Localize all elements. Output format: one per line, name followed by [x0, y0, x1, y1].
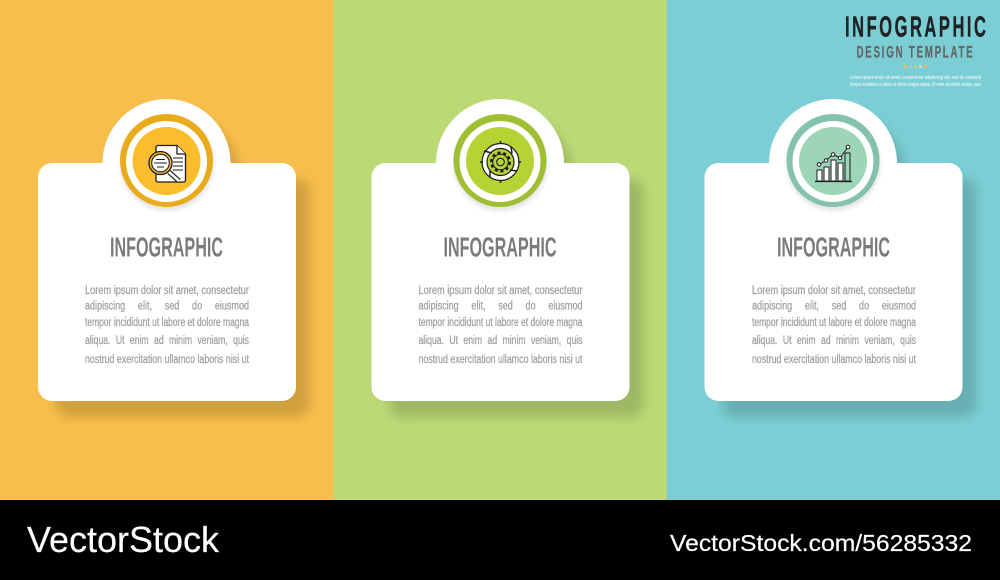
text block: card one: aliqua. Ut enim ad minim veniam, quis	[85, 335, 249, 347]
footer bar	[0, 500, 1000, 580]
heading: card three: INFOGRAPHIC	[777, 232, 890, 262]
panel: orange background	[0, 0, 334, 500]
text block: card three: Lorem ipsum dolor sit amet, consectetur	[752, 285, 916, 297]
card one body	[38, 99, 296, 401]
text block: card two: tempor incididunt ut labore et dolore magna	[418, 317, 583, 329]
card three shadow	[722, 113, 976, 417]
text block: card two: nostrud exercitation ullamco laboris nisi ut	[418, 354, 583, 366]
card one ring shadow	[120, 117, 214, 211]
card two ring	[454, 114, 546, 207]
text block: card three: adipiscing elit, sed do eiusmod	[752, 300, 916, 312]
panel: green background	[333, 0, 667, 500]
text block: card one: tempor incididunt ut labore et dolore magna	[85, 317, 249, 329]
text block: card one: Lorem ipsum dolor sit amet, consectetur	[85, 285, 249, 297]
card two ring shadow	[454, 117, 548, 211]
card two body	[372, 99, 630, 401]
text block: card two: Lorem ipsum dolor sit amet, consectetur	[418, 285, 583, 297]
title description	[850, 75, 981, 88]
card one shadow	[56, 113, 310, 417]
decorative colour dots	[904, 65, 927, 68]
heading: card two: INFOGRAPHIC	[444, 232, 556, 262]
card one white ring	[126, 121, 207, 202]
text block: card two: aliqua. Ut enim ad minim veniam, quis	[418, 335, 583, 347]
card two inner circle	[466, 127, 534, 195]
text block: card one: nostrud exercitation ullamco laboris nisi ut	[85, 354, 250, 366]
panel: card one	[38, 99, 310, 417]
card one ring	[120, 114, 213, 207]
heading: card one: INFOGRAPHIC	[110, 232, 223, 262]
title block	[845, 12, 988, 88]
text block: card three: nostrud exercitation ullamco laboris nisi ut	[752, 354, 917, 366]
panel: card two	[372, 99, 644, 417]
card three inner circle	[799, 127, 867, 195]
text block: card two: adipiscing elit, sed do eiusmod	[418, 300, 582, 312]
card three ring	[786, 114, 880, 207]
text block: card three	[752, 285, 917, 366]
icon: bar chart with trend line	[815, 145, 852, 182]
footer url: VectorStock.com/56285332	[670, 530, 972, 556]
text block: card one	[85, 285, 250, 366]
panel: teal background	[667, 0, 1000, 500]
card two shadow	[390, 113, 644, 417]
card two white ring	[460, 121, 540, 202]
text block: card three: tempor incididunt ut labore et dolore magna	[752, 317, 916, 329]
card one inner circle	[132, 127, 200, 195]
icon: gear with circular arrows	[480, 141, 521, 183]
text block: card two	[418, 285, 583, 366]
card three white ring	[792, 121, 874, 202]
card three ring shadow	[786, 117, 880, 211]
icon: document with magnifier	[149, 146, 186, 182]
text block: card three: aliqua. Ut enim ad minim veniam, quis	[752, 335, 916, 347]
footer logo: VectorStock	[27, 519, 220, 560]
card three body	[704, 99, 962, 401]
panel: card three	[704, 99, 976, 417]
text block: card one: adipiscing elit, sed do eiusmod	[85, 300, 249, 312]
